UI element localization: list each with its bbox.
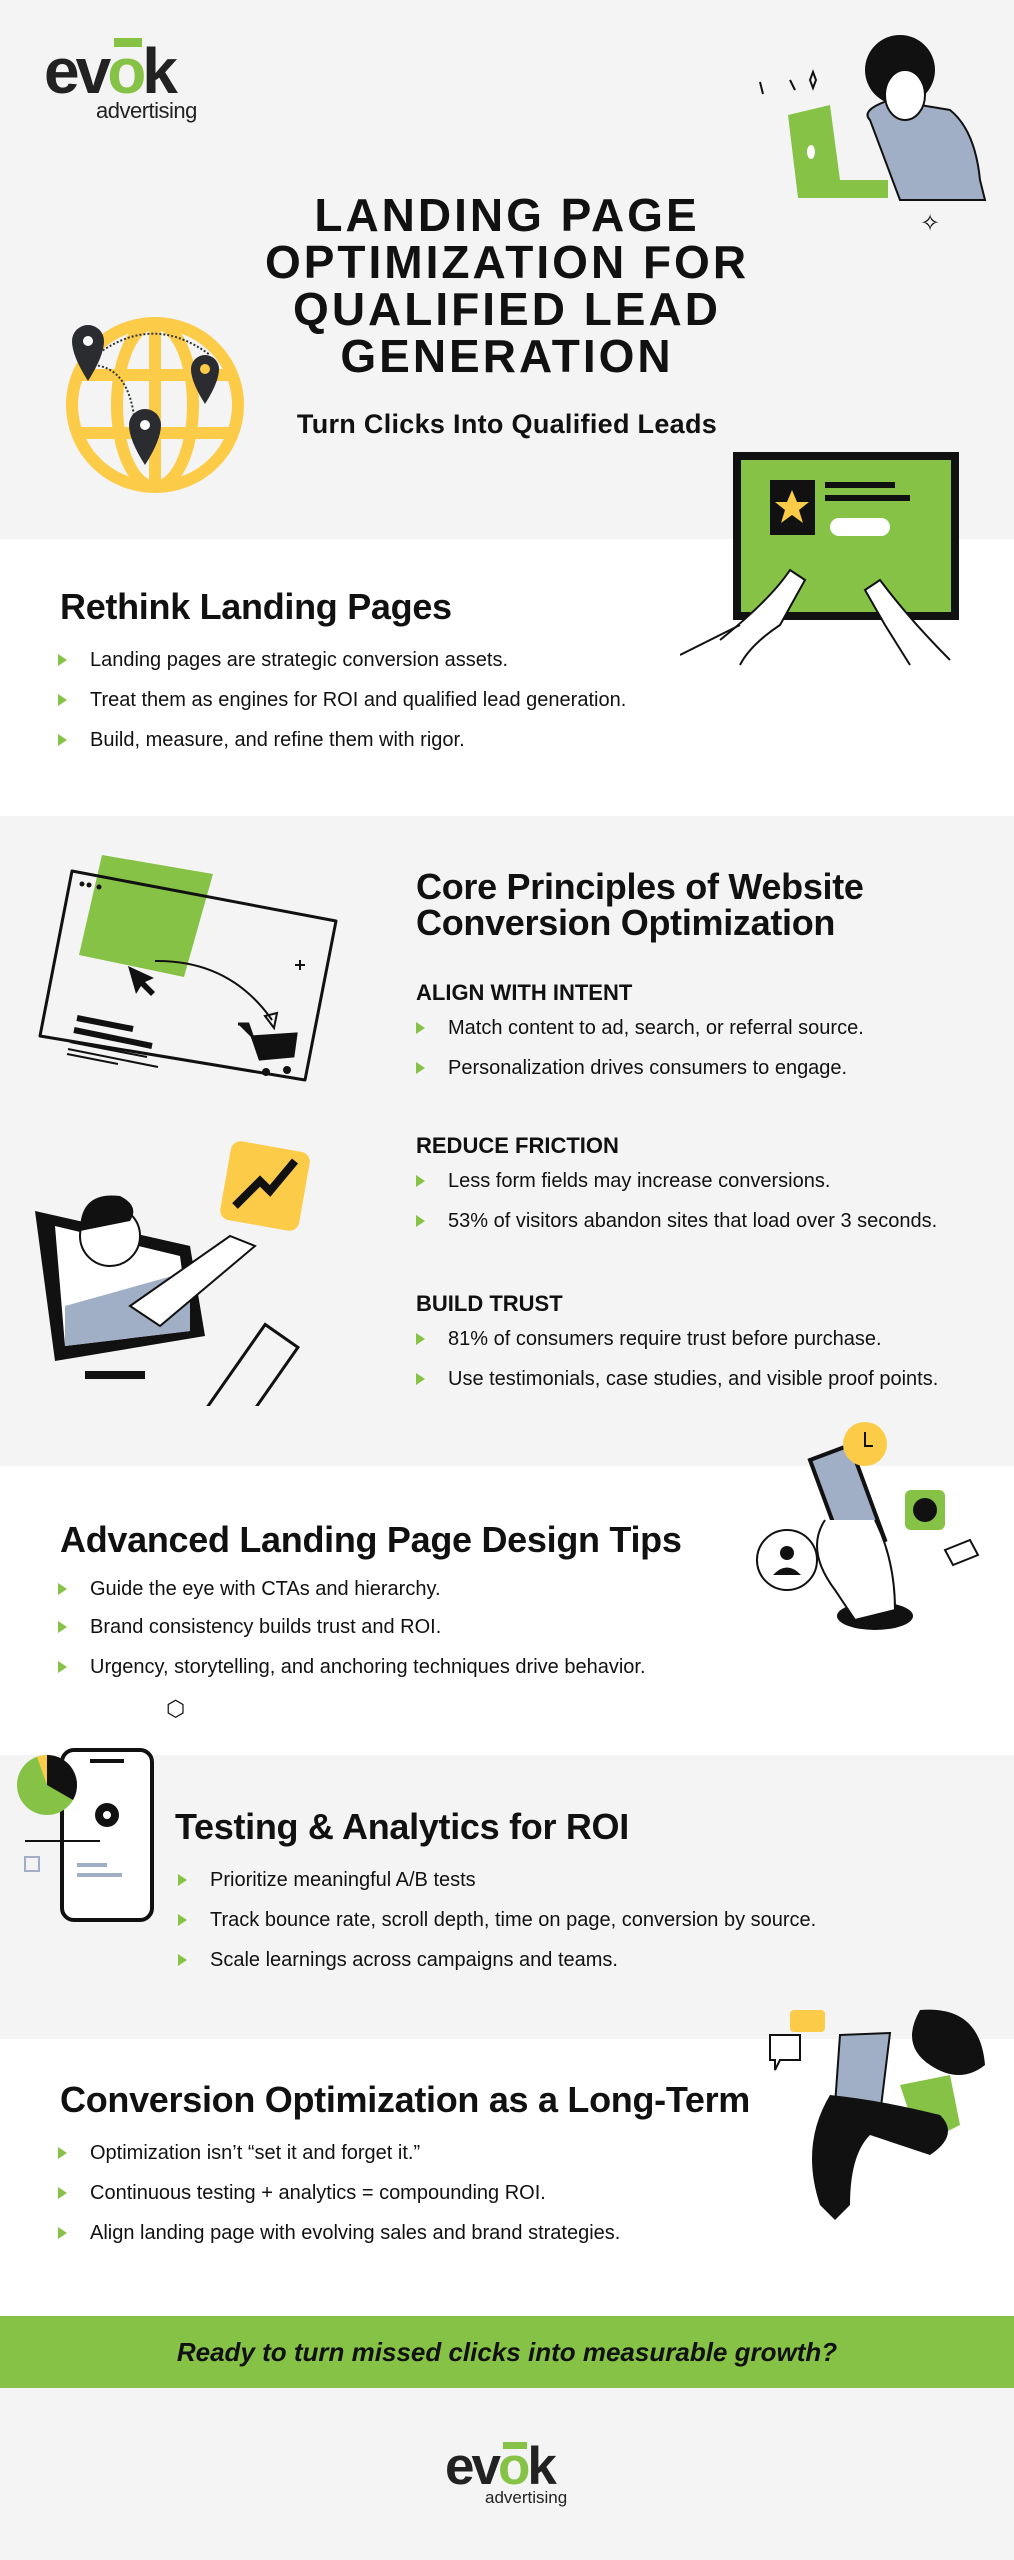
bullets: Brand consistency builds trust and ROI. xyxy=(90,1616,441,1638)
heading: Conversion Optimization xyxy=(416,902,835,943)
title: LANDING PAGE xyxy=(314,189,700,241)
subsection: build trust xyxy=(416,1291,938,1390)
title: OPTIMIZATION FOR xyxy=(265,236,749,288)
bullets: Optimization isn’t “set it and forget it.” xyxy=(90,2142,420,2164)
subsection: align with intent: ALIGN WITH INTENT xyxy=(416,980,632,1005)
bullets: Continuous testing + analytics = compounding ROI. xyxy=(90,2182,546,2204)
subtitle: Turn Clicks Into Qualified Leads xyxy=(297,409,717,439)
bullets: Track bounce rate, scroll depth, time on page, conversion by source. xyxy=(210,1909,816,1931)
title: QUALIFIED LEAD xyxy=(293,283,721,335)
subsection: reduce friction: Less form fields may increase conversions. xyxy=(448,1170,830,1192)
heading: Core Principles of Website xyxy=(416,866,864,907)
subsection: build trust: BUILD TRUST xyxy=(416,1291,563,1316)
illustration: person reaching out of monitor xyxy=(35,1141,310,1406)
illustration: hand with phone xyxy=(756,1422,980,1630)
header background xyxy=(0,0,1014,539)
subsection: align with intent: Match content to ad, search, or referral source. xyxy=(448,1017,864,1039)
call to action bar: Ready to turn missed clicks into measurable growth? xyxy=(177,2337,837,2367)
bullets: Align landing page with evolving sales and brand strategies. xyxy=(90,2222,620,2244)
subsection: reduce friction: 53% of visitors abandon sites that load over 3 seconds. xyxy=(448,1210,937,1232)
heading: Conversion Optimization as a Long-Term xyxy=(60,2079,750,2120)
bullets: Treat them as engines for ROI and qualified lead generation. xyxy=(90,689,626,711)
heading xyxy=(416,866,864,943)
bullets: Guide the eye with CTAs and hierarchy. xyxy=(90,1578,441,1600)
heading: Rethink Landing Pages xyxy=(60,586,452,627)
subsection: align with intent: Personalization drives consumers to engage. xyxy=(448,1057,847,1079)
subsection: align with intent xyxy=(416,980,864,1079)
illustration: phone with pie chart xyxy=(17,1748,154,1922)
illustration: monitor with hands xyxy=(680,452,959,666)
section: long-term xyxy=(0,2039,1014,2316)
logo top: advertising xyxy=(96,98,197,123)
bullets xyxy=(58,649,626,751)
bullets: Urgency, storytelling, and anchoring techniques drive behavior. xyxy=(90,1656,646,1678)
icon: small cube: ⬡ xyxy=(166,1696,185,1721)
bullets: Scale learnings across campaigns and teams. xyxy=(210,1949,618,1971)
subsection: build trust: Use testimonials, case studies, and visible proof points. xyxy=(448,1368,938,1390)
section: rethink xyxy=(0,539,1014,816)
logo top: evok xyxy=(44,35,174,107)
footer logo: advertising xyxy=(485,2488,567,2507)
bullets: Prioritize meaningful A/B tests xyxy=(210,1869,476,1891)
bullets xyxy=(58,1578,646,1678)
footer logo: evok xyxy=(445,2437,554,2496)
subsection: reduce friction: REDUCE FRICTION xyxy=(416,1133,619,1158)
bullets: Landing pages are strategic conversion assets. xyxy=(90,649,508,671)
bullets xyxy=(58,2142,620,2244)
call to action bar xyxy=(0,2316,1014,2388)
section: advanced tips xyxy=(0,1466,1014,1755)
subsection: reduce friction xyxy=(416,1133,937,1232)
icon: sparkle: ✧ xyxy=(920,210,940,237)
illustration: woman with laptop xyxy=(769,2010,985,2220)
section: core principles xyxy=(0,816,1014,1466)
bullets: Build, measure, and refine them with rigor. xyxy=(90,729,465,751)
title: GENERATION xyxy=(340,330,674,382)
logo top xyxy=(44,35,197,123)
section: testing & analytics xyxy=(0,1755,1014,2039)
subsection: build trust: 81% of consumers require trust before purchase. xyxy=(448,1328,882,1350)
illustration: browser window with cart xyxy=(38,855,338,1082)
illustration: person with laptop xyxy=(759,35,986,201)
title xyxy=(265,189,749,382)
heading: Advanced Landing Page Design Tips xyxy=(60,1519,682,1560)
heading: Testing & Analytics for ROI xyxy=(175,1806,629,1847)
bullets xyxy=(178,1869,816,1971)
icon: globe with pins xyxy=(66,317,244,493)
